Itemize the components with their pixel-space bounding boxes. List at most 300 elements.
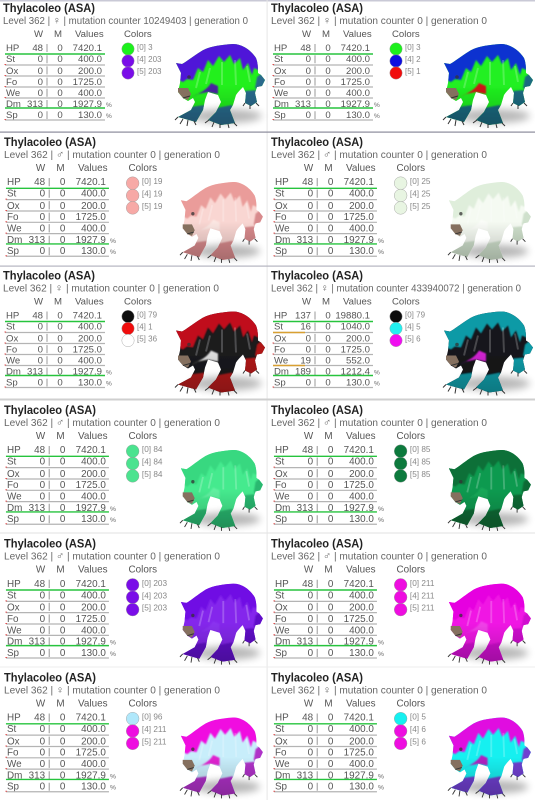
stat table: 0 [40, 748, 46, 759]
stat table: 1927.9 [76, 637, 106, 648]
stat table: 1927.9 [73, 366, 102, 378]
stat table: 400.0 [81, 759, 106, 770]
stat table: 0 [308, 736, 314, 747]
stat table: St [7, 724, 17, 735]
stat table: Values [346, 698, 376, 709]
colour swatches: [5] 25 [410, 202, 431, 211]
stat table: 0 [57, 88, 63, 99]
stat table: 48 [34, 177, 46, 188]
stat table: Sp [6, 378, 18, 388]
stat table: 0 [60, 445, 66, 456]
stat table [272, 296, 380, 388]
stat table: 313 [29, 770, 46, 781]
stat table: Fo [7, 480, 19, 491]
colour swatches [126, 431, 163, 482]
stat table: Values [343, 296, 372, 308]
stat table: 400.0 [81, 724, 106, 735]
stat table: 200.0 [349, 603, 374, 614]
stat table: 48 [34, 445, 46, 456]
stat table: 1725.0 [76, 614, 106, 625]
stat table: 0 [38, 378, 43, 388]
stat table: 0 [325, 66, 331, 77]
stat table [5, 698, 116, 793]
colour swatches: [4] 85 [410, 458, 431, 467]
colour swatches: [5] 36 [137, 334, 158, 344]
stat table: 0 [40, 201, 46, 212]
stat table: Values [78, 698, 108, 709]
stat table: 0 [308, 724, 314, 735]
stat table: 1725.0 [344, 748, 374, 759]
colour swatches: [0] 5 [410, 713, 426, 722]
stat table: St [274, 54, 283, 65]
stat table: 0 [60, 748, 66, 759]
panel: violet male [4, 537, 268, 666]
stat table: HP [275, 177, 289, 188]
stat table: 0 [328, 759, 334, 770]
colour swatches: [5] 1 [405, 67, 421, 76]
stat table: 0 [325, 366, 331, 378]
panel: black red white female [3, 268, 270, 398]
stat table: St [275, 189, 285, 200]
stat table: 0 [40, 759, 46, 770]
title: Thylacoleo (ASA) [271, 1, 363, 15]
colour swatches: [5] 85 [410, 470, 431, 479]
stat table: 200.0 [349, 469, 374, 480]
colour swatches: [0] 84 [142, 445, 163, 454]
stat table: Fo [7, 614, 19, 625]
stat table: 7420.1 [73, 43, 102, 54]
stat table: 0 [325, 77, 331, 88]
colour swatches: Colors [129, 565, 157, 576]
stat table: 0 [60, 212, 66, 223]
stat table: 313 [297, 503, 314, 514]
stat table: 0 [328, 603, 334, 614]
stat table: 0 [40, 492, 46, 503]
stat table: HP [275, 713, 289, 724]
stat table: 0 [60, 469, 66, 480]
stat table: 0 [38, 77, 43, 88]
stat table: HP [274, 310, 287, 322]
stat table: Dm [274, 99, 289, 110]
level line: Level 362 | ♀ | mutation counter 0 | generation 0 [271, 15, 487, 27]
stat table: 130.0 [349, 514, 374, 525]
stat table: 0 [40, 469, 46, 480]
stat table: 0 [328, 770, 334, 781]
stat table: 130.0 [78, 110, 102, 121]
stat table: Values [75, 29, 104, 40]
stat table: 200.0 [81, 201, 106, 212]
stat table: % [110, 640, 116, 647]
stat table: 400.0 [78, 356, 102, 366]
colour swatches: Colors [124, 296, 152, 308]
stat table: We [7, 224, 22, 235]
stat table: 0 [306, 77, 311, 88]
colour swatches: [5] 203 [137, 67, 162, 76]
stat table: 0 [60, 579, 66, 590]
stat table: 0 [328, 713, 334, 724]
stat table: 0 [57, 54, 63, 65]
colour swatches [122, 29, 162, 79]
colour swatches: [4] 19 [142, 190, 163, 199]
stat table: M [56, 431, 65, 442]
stat table: 200.0 [346, 66, 370, 77]
stat table: We [7, 759, 22, 770]
stat table: 0 [325, 356, 331, 366]
colour swatches: [4] 211 [410, 591, 435, 600]
stat table: 0 [57, 378, 63, 388]
stat table: 0 [306, 54, 311, 65]
panel: magenta male [271, 537, 535, 666]
stat table: 1927.9 [73, 99, 102, 110]
colour swatches: [5] 6 [405, 334, 421, 344]
stat table: Sp [274, 378, 286, 388]
stat table: 0 [328, 480, 334, 491]
stat table: 48 [302, 445, 314, 456]
stat table: M [56, 163, 65, 174]
creature render [438, 308, 535, 398]
stat table: 0 [325, 43, 331, 54]
colour swatches [394, 163, 431, 214]
stat table: Values [78, 431, 108, 442]
colour swatches: [4] 211 [142, 725, 167, 734]
stat table: 1927.9 [344, 503, 374, 514]
stat table: 400.0 [78, 322, 102, 332]
stat table: We [6, 356, 20, 366]
colour swatches: [5] 84 [142, 470, 163, 479]
stat table: 0 [60, 782, 66, 793]
stat table: 400.0 [81, 492, 106, 503]
stat table: 0 [57, 77, 63, 88]
stat table: 0 [308, 469, 314, 480]
creature render [170, 308, 270, 398]
stat table: 0 [328, 469, 334, 480]
stat table: 0 [60, 503, 66, 514]
stat table: 0 [60, 724, 66, 735]
stat table: % [378, 517, 384, 524]
stat table: 400.0 [349, 189, 374, 200]
stat table: HP [7, 177, 21, 188]
stat table: 400.0 [349, 759, 374, 770]
stat table: 552.0 [346, 356, 370, 366]
stat table: % [378, 640, 384, 647]
stat table: Sp [7, 782, 20, 793]
stat table: 0 [40, 590, 46, 601]
stat table: 0 [40, 648, 46, 659]
stat table [5, 163, 116, 257]
colour swatches: [0] 3 [405, 43, 421, 52]
stat table: 200.0 [349, 736, 374, 747]
colour swatches: [0] 203 [142, 579, 168, 588]
panel: pink male [4, 135, 268, 265]
stat table: We [7, 625, 22, 636]
stat table: 400.0 [81, 189, 106, 200]
stat table: Fo [275, 212, 287, 223]
stat table: We [275, 492, 290, 503]
stat table: 0 [38, 54, 43, 65]
stat table: 0 [328, 492, 334, 503]
colour swatches [126, 698, 167, 750]
stat table: Ox [7, 736, 20, 747]
stat table: 0 [60, 246, 66, 257]
stat table: St [7, 590, 17, 601]
stat table: 313 [29, 503, 46, 514]
level line: Level 362 | ♀ | mutation counter 0 | generation 0 [4, 684, 220, 696]
stat table: W [34, 296, 44, 308]
stat table: 0 [40, 625, 46, 636]
stat table: Dm [7, 637, 22, 648]
stat table: 1725.0 [344, 614, 374, 625]
stat table: % [378, 785, 384, 792]
stat table: St [6, 54, 15, 65]
level line: Level 362 | ♂ | mutation counter 0 | generation 0 [271, 551, 487, 563]
stat table: Fo [274, 77, 285, 88]
level line: Level 362 | ♂ | mutation counter 0 | generation 0 [4, 417, 220, 429]
stat table: 0 [57, 310, 63, 322]
stat table: Values [346, 431, 376, 442]
stat table: 0 [60, 492, 66, 503]
stat table: HP [274, 43, 287, 54]
stat table: 200.0 [81, 736, 106, 747]
stat table: Ox [275, 736, 288, 747]
stat table: 400.0 [349, 590, 374, 601]
colour swatches: [5] 19 [142, 202, 163, 211]
stat table: Dm [7, 503, 22, 514]
stat table: 0 [325, 54, 331, 65]
stat table: M [324, 163, 333, 174]
stat table: Ox [6, 334, 18, 344]
stat table: 0 [328, 177, 334, 188]
stat table: 48 [302, 177, 314, 188]
stat table: 7420.1 [76, 445, 106, 456]
stat table: W [304, 698, 314, 709]
level line: Level 362 | ♂ | mutation counter 0 | generation 0 [271, 149, 487, 161]
stat table: 1725.0 [76, 212, 106, 223]
stat table: M [54, 29, 62, 40]
stat table: We [7, 492, 22, 503]
stat table: 0 [328, 782, 334, 793]
title: Thylacoleo (ASA) [4, 135, 96, 149]
colour swatches: Colors [397, 431, 425, 442]
stat table: 0 [328, 648, 334, 659]
panel: mint green male [4, 403, 268, 533]
stat table: 48 [34, 713, 46, 724]
title: Thylacoleo (ASA) [4, 403, 96, 417]
stat table: 400.0 [349, 724, 374, 735]
stat table: 1725.0 [76, 480, 106, 491]
stat table: 0 [328, 724, 334, 735]
creature render [175, 446, 268, 533]
stat table: Sp [275, 782, 288, 793]
stat table: 1040.0 [341, 322, 370, 332]
stat table: 0 [306, 334, 311, 344]
colour swatches: [0] 3 [137, 43, 153, 52]
colour swatches: [5] 211 [142, 737, 167, 746]
creature render [443, 714, 535, 800]
stat table: 0 [57, 99, 63, 110]
stat table: Sp [275, 246, 288, 257]
stat table: 1725.0 [76, 748, 106, 759]
stat table: 0 [57, 366, 63, 378]
stat table: HP [275, 579, 289, 590]
stat table: We [275, 759, 290, 770]
stat table: % [378, 249, 384, 256]
stat table: 0 [308, 246, 314, 257]
stat table: 0 [328, 637, 334, 648]
stat table: Dm [7, 235, 22, 246]
colour swatches: [0] 79 [405, 310, 426, 320]
stat table: 0 [60, 736, 66, 747]
colour swatches: [0] 96 [142, 713, 163, 722]
stat table: Sp [7, 648, 20, 659]
stat table: 189 [295, 366, 311, 378]
stat table: 400.0 [346, 54, 370, 65]
stat table [273, 431, 384, 525]
stat table: Sp [275, 648, 288, 659]
stat table: 48 [300, 43, 311, 54]
stat table: Dm [274, 366, 289, 378]
colour swatches: [4] 5 [405, 322, 421, 332]
stat table: W [36, 698, 46, 709]
stat table: 0 [57, 322, 63, 332]
colour swatches: Colors [397, 163, 425, 174]
stat table: W [36, 431, 46, 442]
creature render [443, 446, 535, 533]
stat table: 0 [325, 99, 331, 110]
stat table: Fo [6, 77, 17, 88]
stat table: 0 [328, 503, 334, 514]
stat table: 400.0 [81, 457, 106, 468]
stat table: 0 [60, 614, 66, 625]
stat table: 130.0 [349, 782, 374, 793]
stat table: 0 [328, 246, 334, 257]
stat table: 200.0 [78, 334, 102, 344]
creature render [443, 178, 535, 265]
stat table: Values [346, 163, 376, 174]
stat table: 0 [60, 648, 66, 659]
stat table: 0 [60, 224, 66, 235]
level line: Level 362 | ♀ | mutation counter 10249403 | generation 0 [3, 15, 248, 27]
stat table: 0 [308, 480, 314, 491]
stat table: % [374, 380, 380, 388]
stat table: 130.0 [349, 648, 374, 659]
stat table: 0 [57, 110, 63, 121]
stat table: 400.0 [78, 88, 102, 99]
stat table: 19 [300, 356, 311, 366]
colour swatches: [4] 25 [410, 190, 431, 199]
stat table: St [275, 590, 285, 601]
stat table: St [274, 322, 283, 332]
colour swatches: [0] 25 [410, 177, 431, 186]
stat table: % [374, 370, 380, 376]
stat table: 48 [302, 579, 314, 590]
stat table [273, 698, 384, 793]
stat table: HP [6, 43, 19, 54]
panel: pale green male [271, 135, 535, 265]
stat table: W [302, 296, 312, 308]
stat table: 0 [60, 189, 66, 200]
stat table: 400.0 [78, 54, 102, 65]
colour swatches: [0] 85 [410, 445, 431, 454]
title: Thylacoleo (ASA) [271, 135, 363, 149]
creature render [175, 714, 268, 800]
stat table: % [106, 380, 112, 388]
stat table: 48 [34, 579, 46, 590]
stat table: 200.0 [81, 469, 106, 480]
stat table: We [274, 356, 288, 366]
stat table: 0 [306, 378, 311, 388]
colour swatches: [0] 19 [142, 177, 163, 186]
stat table: % [378, 238, 384, 245]
panel: green blue red female [271, 1, 535, 130]
colour swatches: [0] 79 [137, 310, 158, 320]
stat table: 0 [325, 378, 331, 388]
title: Thylacoleo (ASA) [3, 1, 95, 15]
stat table: 313 [297, 637, 314, 648]
stat table: Values [78, 163, 108, 174]
stat table: % [110, 773, 116, 780]
stat table: Fo [275, 748, 287, 759]
stat table: 0 [57, 43, 63, 54]
stat table: W [36, 565, 46, 576]
colour swatches [126, 565, 168, 616]
stat table: St [6, 322, 15, 332]
stat table: Dm [6, 366, 21, 378]
stat table: 0 [325, 322, 331, 332]
stat table: 0 [328, 235, 334, 246]
stat table: 7420.1 [344, 445, 374, 456]
stat table: 0 [57, 356, 63, 366]
stat table: 0 [38, 344, 43, 356]
stat table: St [275, 457, 285, 468]
stat table: 313 [297, 770, 314, 781]
stat table: 0 [308, 648, 314, 659]
stat table: We [275, 224, 290, 235]
stat table [272, 29, 380, 121]
stat table: 0 [308, 201, 314, 212]
stat table [5, 565, 116, 659]
stat table: 7420.1 [344, 713, 374, 724]
stat table: % [110, 238, 116, 245]
stat table: 0 [328, 579, 334, 590]
stat table: % [110, 506, 116, 513]
stat table: 0 [60, 235, 66, 246]
colour swatches [122, 296, 158, 347]
colour swatches: [4] 1 [137, 322, 153, 332]
colour swatches: [5] 6 [410, 737, 426, 746]
stat table: We [274, 88, 288, 99]
stat table: Ox [7, 469, 20, 480]
stat table: Dm [275, 235, 290, 246]
stat table: 0 [328, 212, 334, 223]
stat table: 0 [328, 224, 334, 235]
stat table: 0 [325, 334, 331, 344]
stat table: Ox [275, 201, 288, 212]
stat table: 130.0 [78, 378, 102, 388]
stat table: M [324, 565, 333, 576]
colour swatches: Colors [129, 698, 157, 709]
stat table: 0 [57, 344, 63, 356]
stat table: 0 [60, 625, 66, 636]
stat table: 130.0 [81, 514, 106, 525]
stat table: 0 [306, 344, 311, 356]
stat table: 0 [40, 782, 46, 793]
stat table: 1927.9 [76, 770, 106, 781]
stat table: 400.0 [81, 224, 106, 235]
stat table: 130.0 [346, 378, 370, 388]
stat table: 130.0 [81, 782, 106, 793]
stat table: 0 [38, 110, 43, 121]
stat table: M [56, 565, 65, 576]
